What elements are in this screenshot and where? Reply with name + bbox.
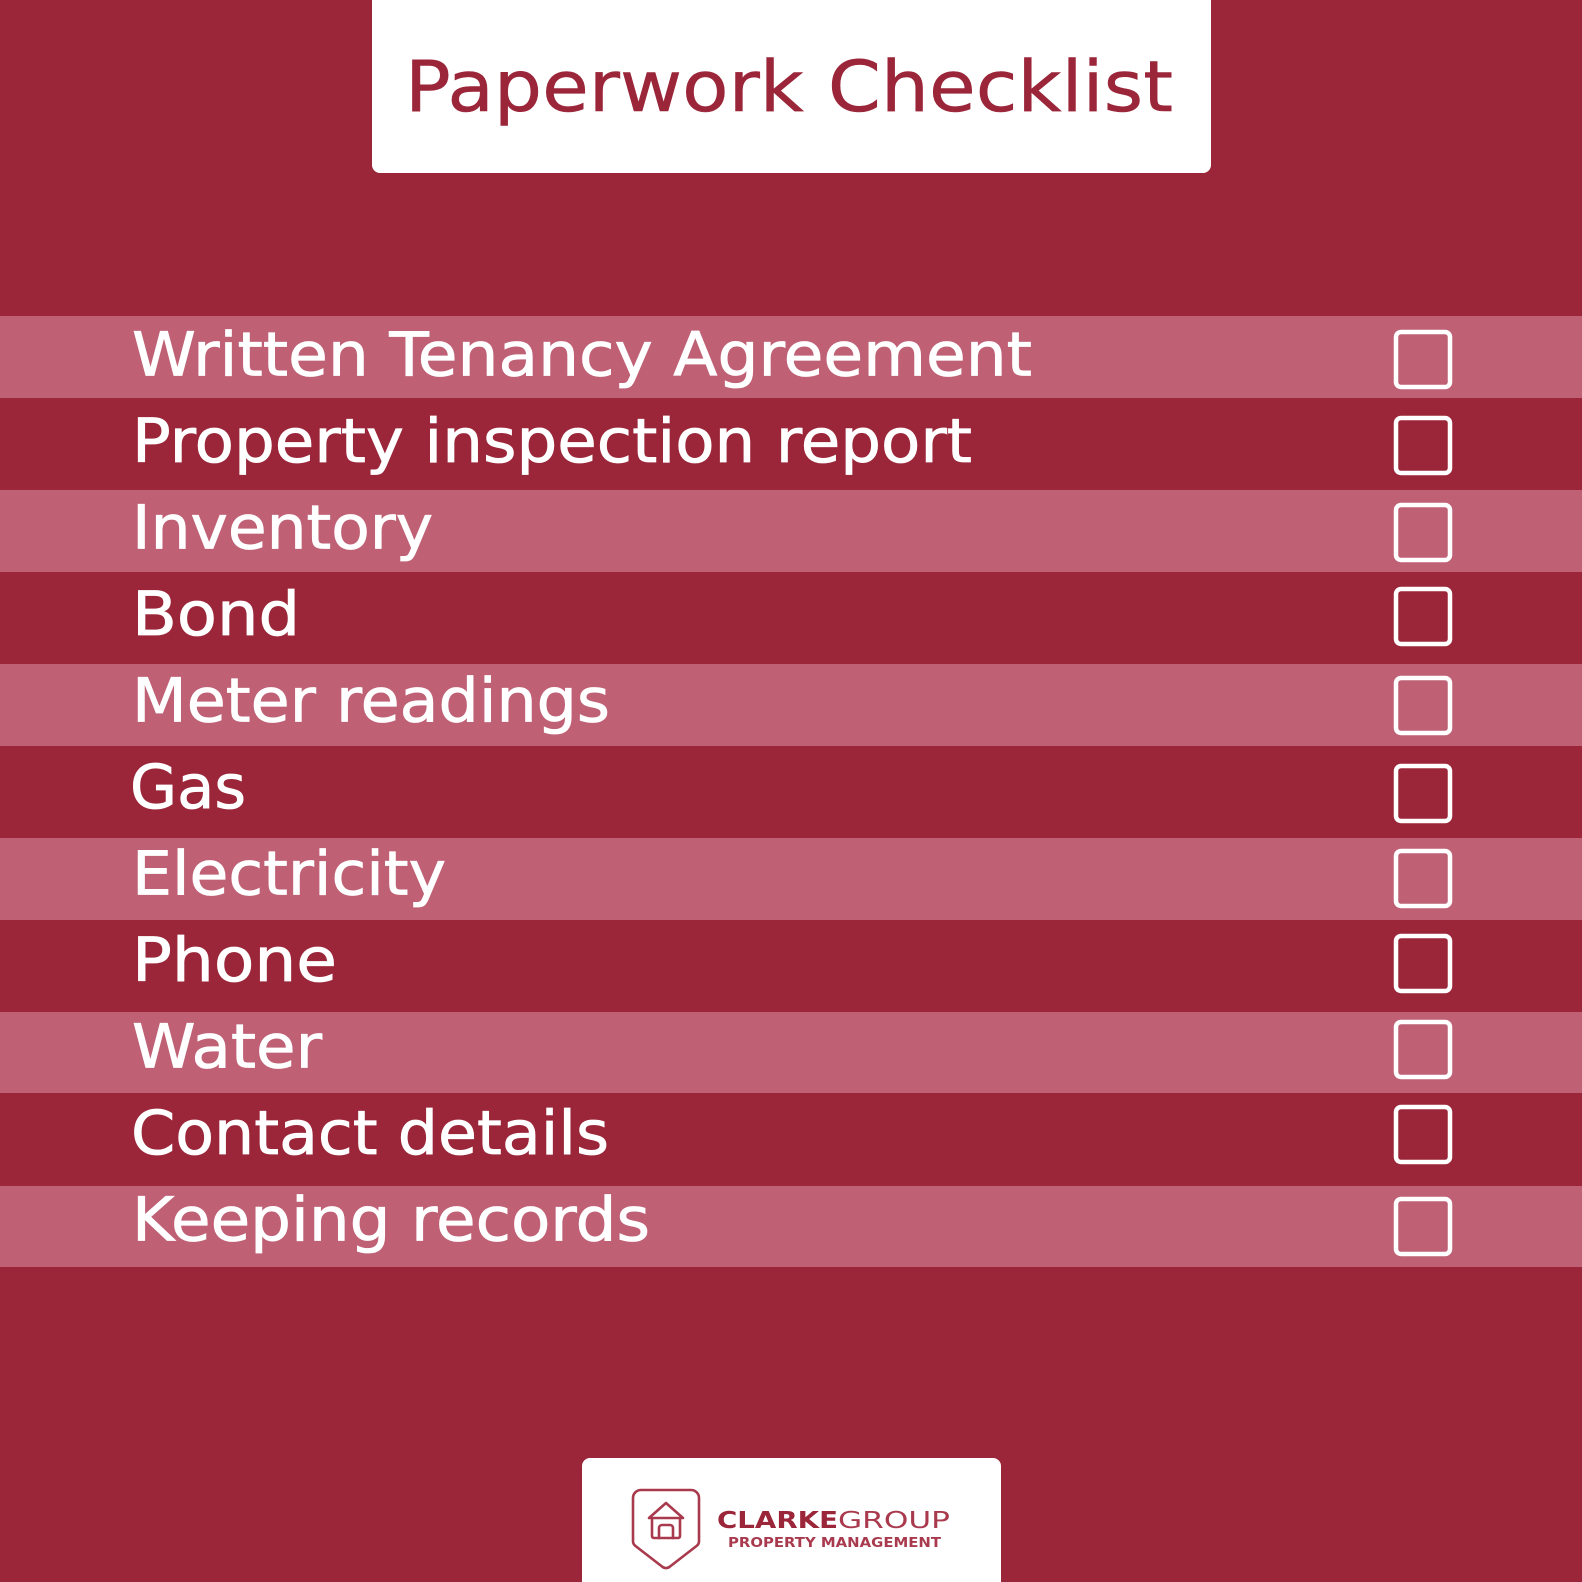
checklist — [0, 316, 1582, 1267]
row: Inventory: Inventory — [132, 492, 433, 564]
row: Water: Water — [132, 1012, 323, 1082]
row: Electricity — [0, 838, 1582, 920]
row: Written Tenancy Agreement: Written Tenancy Agreement — [132, 320, 1032, 390]
row: Contact details — [131, 1098, 1450, 1169]
row: Gas — [130, 752, 1450, 823]
row: Keeping records — [0, 1184, 1582, 1267]
row: Phone — [132, 925, 1450, 996]
row: Meter readings — [0, 664, 1582, 746]
title panel — [372, 0, 1211, 173]
logo wordmark: GROUP — [838, 1506, 950, 1534]
row: Gas: Gas — [130, 752, 246, 823]
row: Electricity: Electricity — [132, 838, 446, 910]
row: Property inspection report — [132, 406, 1450, 477]
row: Inventory — [0, 490, 1582, 572]
logo wordmark — [717, 1506, 950, 1551]
icon: shield with house — [633, 1490, 699, 1568]
row: Meter readings: Meter readings — [132, 666, 610, 736]
row: Contact details: Contact details — [131, 1098, 609, 1169]
logo wordmark: PROPERTY MANAGEMENT — [728, 1535, 942, 1551]
logo panel — [582, 1458, 1001, 1582]
row: Property inspection report: Property inspection report — [132, 406, 972, 477]
row: Phone: Phone — [132, 925, 337, 996]
row: Keeping records: Keeping records — [132, 1184, 650, 1256]
row: Bond: Bond — [132, 579, 300, 650]
logo wordmark: CLARKE — [717, 1506, 838, 1534]
row: Water — [0, 1012, 1582, 1093]
row: Bond — [132, 579, 1450, 650]
title: Paperwork Checklist — [405, 46, 1173, 128]
row: Written Tenancy Agreement — [0, 316, 1582, 398]
